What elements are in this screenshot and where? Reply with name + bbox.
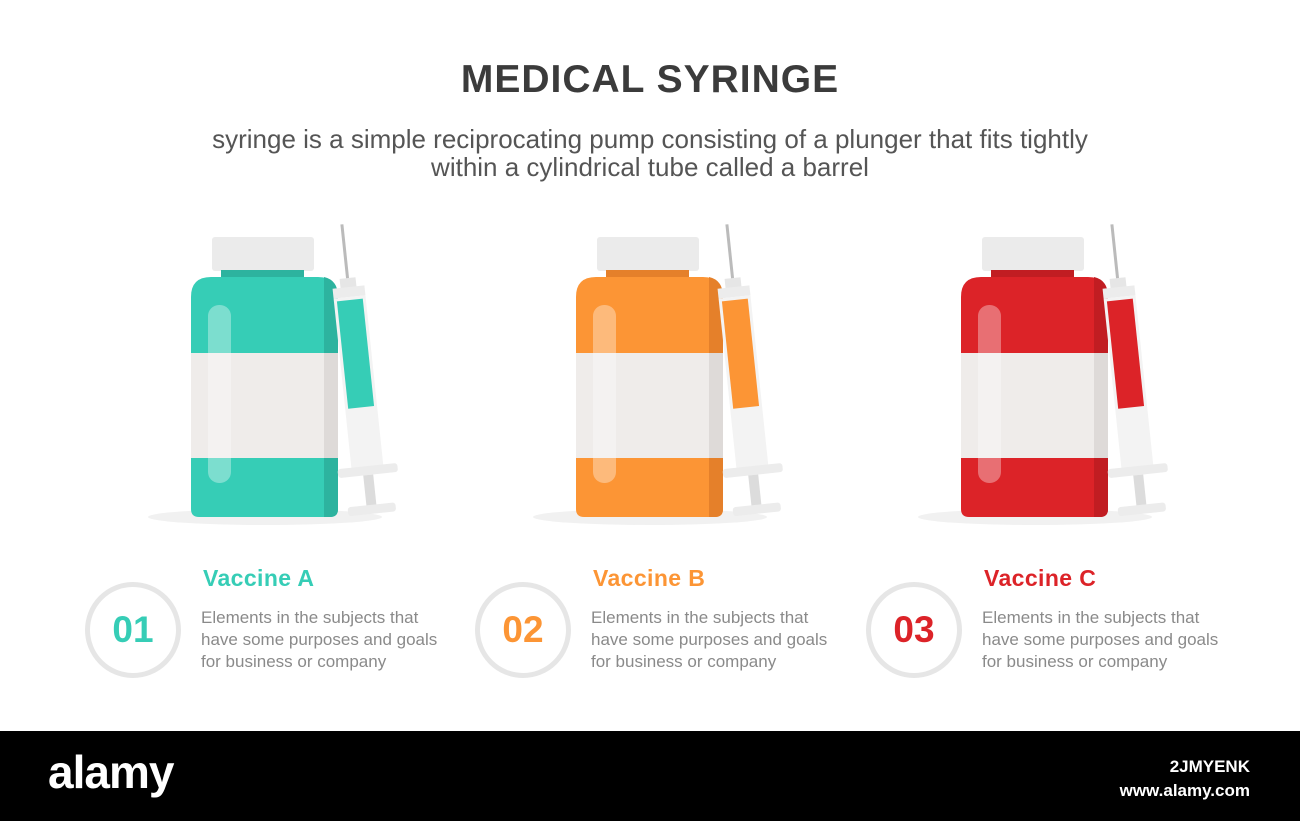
subtitle: within a cylindrical tube called a barrel — [431, 152, 869, 182]
number circle 03: 03 — [893, 609, 935, 650]
number circle 01: 01 — [112, 609, 154, 650]
item A — [85, 565, 437, 678]
illustration: vaccine C bottle and syringe — [918, 221, 1172, 525]
description B: Elements in the subjects that have some purposes and goals for business or company — [591, 608, 827, 671]
subtitle: syringe is a simple reciprocating pump consisting of a plunger that fits tightly — [212, 124, 1088, 154]
heading Vaccine B: Vaccine B — [593, 565, 705, 591]
illustration: vaccine A bottle and syringe — [148, 221, 402, 525]
number circle 02 — [475, 582, 571, 678]
number circle 03 — [866, 582, 962, 678]
number circle 01 — [85, 582, 181, 678]
footer image id: www.alamy.com — [1120, 781, 1250, 800]
item B — [475, 565, 827, 678]
illustrations — [148, 224, 1168, 525]
illustration: vaccine B bottle and syringe — [533, 221, 787, 525]
description A: Elements in the subjects that have some purposes and goals for business or company — [201, 608, 437, 671]
description C: Elements in the subjects that have some purposes and goals for business or company — [982, 608, 1218, 671]
subtitle — [212, 124, 1088, 182]
footer bar — [0, 731, 1300, 821]
heading Vaccine A: Vaccine A — [203, 565, 314, 591]
title: MEDICAL SYRINGE — [461, 58, 839, 101]
number circle 02: 02 — [502, 609, 544, 650]
footer image id: 2JMYENK — [1170, 757, 1250, 776]
footer logo: alamy — [48, 746, 173, 798]
footer image id — [1120, 757, 1250, 800]
heading Vaccine C: Vaccine C — [984, 565, 1096, 591]
item C — [866, 565, 1218, 678]
